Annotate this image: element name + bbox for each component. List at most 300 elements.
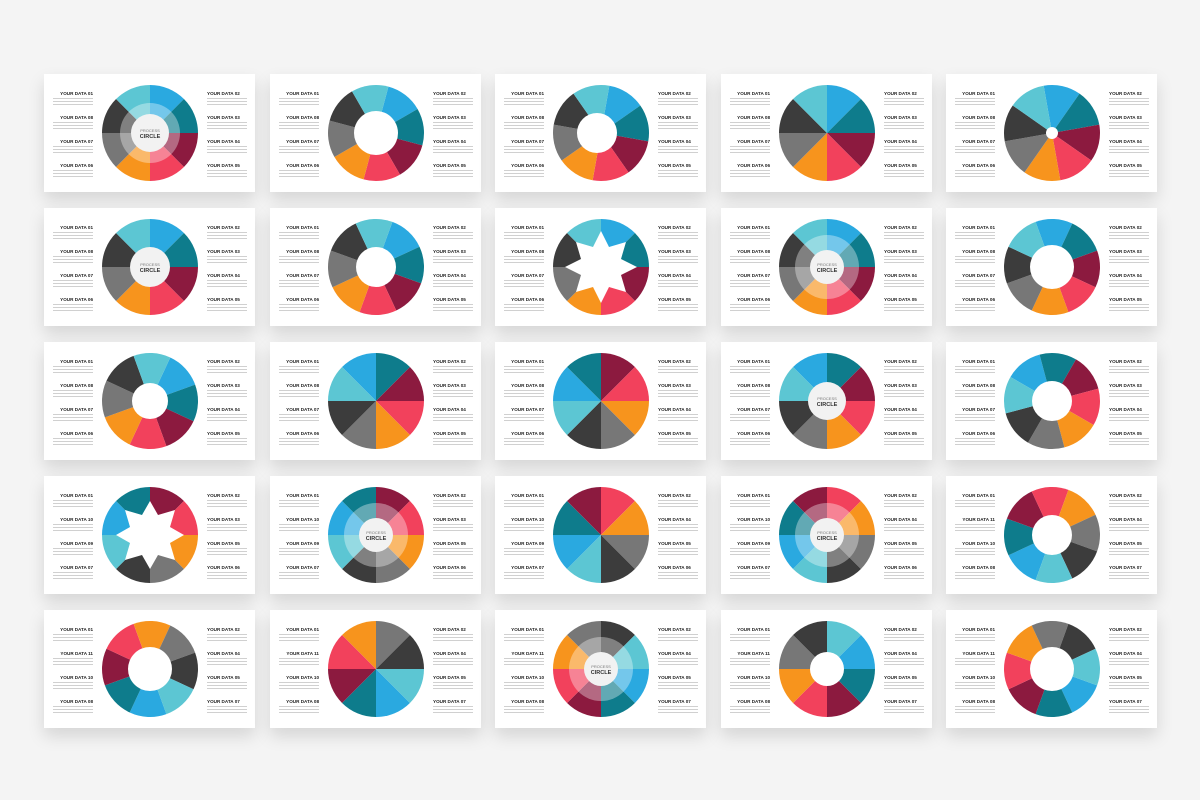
left labels — [730, 91, 770, 177]
left labels: YOUR DATA 08 — [511, 249, 544, 254]
left labels — [279, 493, 319, 589]
right labels: YOUR DATA 05 — [1109, 541, 1142, 546]
left labels: YOUR DATA 06 — [737, 431, 770, 436]
left labels: YOUR DATA 08 — [962, 699, 995, 704]
right labels — [658, 493, 698, 589]
left labels: YOUR DATA 08 — [962, 565, 995, 570]
left labels: YOUR DATA 06 — [286, 297, 319, 302]
right labels — [1109, 627, 1149, 723]
right labels: YOUR DATA 05 — [1109, 431, 1142, 436]
left labels: YOUR DATA 07 — [60, 273, 93, 278]
right labels: YOUR DATA 04 — [1109, 651, 1142, 656]
right labels — [1109, 225, 1149, 311]
left labels: YOUR DATA 06 — [962, 431, 995, 436]
right labels: YOUR DATA 04 — [658, 651, 691, 656]
right labels: YOUR DATA 04 — [207, 407, 240, 412]
left labels: YOUR DATA 08 — [511, 115, 544, 120]
left labels: YOUR DATA 06 — [60, 163, 93, 168]
right labels: YOUR DATA 05 — [658, 541, 691, 546]
left labels — [53, 91, 93, 177]
right labels: YOUR DATA 03 — [884, 249, 917, 254]
process circle chart: CIRCLE — [140, 134, 161, 140]
left labels: YOUR DATA 07 — [511, 139, 544, 144]
right labels: YOUR DATA 03 — [884, 115, 917, 120]
right labels: YOUR DATA 05 — [884, 163, 917, 168]
right labels: YOUR DATA 05 — [884, 541, 917, 546]
left labels: YOUR DATA 09 — [60, 541, 93, 546]
right labels: YOUR DATA 07 — [1109, 565, 1142, 570]
left labels — [53, 493, 93, 589]
right labels: YOUR DATA 04 — [1109, 139, 1142, 144]
star ring chart — [100, 485, 200, 585]
right labels: YOUR DATA 04 — [658, 407, 691, 412]
process circle chart: CIRCLE — [591, 670, 612, 676]
process circle chart: CIRCLE — [140, 268, 161, 274]
left labels — [279, 91, 319, 177]
right labels: YOUR DATA 03 — [433, 115, 466, 120]
right labels: YOUR DATA 02 — [207, 359, 240, 364]
spiral ring chart — [1002, 351, 1102, 451]
right labels: YOUR DATA 02 — [658, 359, 691, 364]
right labels: YOUR DATA 03 — [433, 383, 466, 388]
left labels — [504, 359, 544, 445]
left labels: YOUR DATA 11 — [286, 651, 319, 656]
right labels: YOUR DATA 04 — [207, 651, 240, 656]
pie chart — [328, 353, 424, 449]
right labels — [884, 225, 924, 311]
slide 10 — [946, 208, 1157, 326]
right labels: YOUR DATA 07 — [1109, 699, 1142, 704]
left labels: YOUR DATA 08 — [737, 249, 770, 254]
right labels: YOUR DATA 05 — [884, 431, 917, 436]
process circle chart: PROCESS — [817, 262, 837, 267]
right labels: YOUR DATA 04 — [884, 407, 917, 412]
left labels: YOUR DATA 10 — [511, 675, 544, 680]
right labels: YOUR DATA 05 — [884, 297, 917, 302]
left labels: YOUR DATA 10 — [286, 675, 319, 680]
right labels: YOUR DATA 02 — [433, 627, 466, 632]
left labels: YOUR DATA 09 — [511, 541, 544, 546]
right labels: YOUR DATA 07 — [207, 699, 240, 704]
left labels: YOUR DATA 06 — [962, 163, 995, 168]
left labels: YOUR DATA 09 — [286, 541, 319, 546]
right labels: YOUR DATA 05 — [433, 297, 466, 302]
left labels: YOUR DATA 10 — [962, 675, 995, 680]
right labels: YOUR DATA 02 — [433, 91, 466, 96]
process circle chart: CIRCLE — [817, 402, 838, 408]
right labels — [207, 225, 247, 311]
left labels: YOUR DATA 01 — [286, 225, 319, 230]
right labels: YOUR DATA 05 — [1109, 675, 1142, 680]
left labels: YOUR DATA 06 — [511, 163, 544, 168]
process circle chart — [777, 485, 877, 585]
right labels — [433, 91, 473, 177]
slide 8 — [495, 208, 706, 326]
left labels: YOUR DATA 01 — [962, 493, 995, 498]
left labels — [955, 359, 995, 455]
left labels — [730, 627, 770, 723]
process circle chart — [102, 85, 198, 181]
left labels: YOUR DATA 11 — [737, 651, 770, 656]
right labels: YOUR DATA 03 — [433, 249, 466, 254]
right labels — [884, 493, 924, 589]
left labels — [955, 91, 995, 177]
right labels: YOUR DATA 04 — [658, 139, 691, 144]
donut chart — [553, 85, 649, 181]
left labels: YOUR DATA 08 — [60, 383, 93, 388]
star ring chart — [553, 219, 649, 315]
right labels — [1109, 91, 1149, 177]
right labels: YOUR DATA 03 — [1109, 115, 1142, 120]
left labels: YOUR DATA 11 — [962, 651, 995, 656]
left labels: YOUR DATA 10 — [60, 517, 93, 522]
left labels: YOUR DATA 07 — [60, 565, 93, 570]
right labels: YOUR DATA 02 — [433, 359, 466, 364]
right labels: YOUR DATA 04 — [433, 651, 466, 656]
right labels: YOUR DATA 05 — [207, 163, 240, 168]
right labels — [207, 359, 247, 445]
right labels: YOUR DATA 05 — [207, 297, 240, 302]
left labels: YOUR DATA 01 — [286, 359, 319, 364]
process circle chart: PROCESS — [140, 262, 160, 267]
left labels: YOUR DATA 01 — [737, 359, 770, 364]
process circle chart — [326, 485, 426, 585]
right labels: YOUR DATA 03 — [207, 383, 240, 388]
left labels: YOUR DATA 01 — [737, 91, 770, 96]
left labels — [53, 225, 93, 311]
slide 13 — [495, 342, 706, 460]
slide 20 — [946, 476, 1157, 594]
left labels: YOUR DATA 11 — [962, 517, 995, 522]
left labels: YOUR DATA 08 — [286, 115, 319, 120]
left labels: YOUR DATA 08 — [511, 699, 544, 704]
right labels: YOUR DATA 05 — [1109, 297, 1142, 302]
right labels: YOUR DATA 04 — [207, 139, 240, 144]
right labels — [884, 627, 924, 723]
slide 3 — [495, 74, 706, 192]
left labels: YOUR DATA 06 — [962, 297, 995, 302]
right labels: YOUR DATA 07 — [658, 699, 691, 704]
slide 11 — [44, 342, 255, 460]
slide 23 — [495, 610, 706, 728]
right labels — [207, 91, 247, 177]
right labels: YOUR DATA 04 — [1109, 407, 1142, 412]
left labels: YOUR DATA 08 — [737, 699, 770, 704]
right labels: YOUR DATA 02 — [207, 493, 240, 498]
right labels: YOUR DATA 05 — [433, 163, 466, 168]
left labels: YOUR DATA 08 — [962, 115, 995, 120]
left labels: YOUR DATA 08 — [286, 383, 319, 388]
left labels: YOUR DATA 07 — [737, 407, 770, 412]
right labels: YOUR DATA 04 — [884, 651, 917, 656]
left labels: YOUR DATA 10 — [737, 517, 770, 522]
left labels: YOUR DATA 07 — [60, 139, 93, 144]
left labels: YOUR DATA 08 — [737, 383, 770, 388]
left labels: YOUR DATA 08 — [962, 383, 995, 388]
right labels: YOUR DATA 03 — [1109, 383, 1142, 388]
left labels: YOUR DATA 08 — [286, 699, 319, 704]
left labels — [504, 91, 544, 177]
right labels: YOUR DATA 02 — [433, 493, 466, 498]
slide 18 — [495, 476, 706, 594]
slide 4 — [721, 74, 932, 192]
left labels: YOUR DATA 06 — [286, 163, 319, 168]
slide 19 — [721, 476, 932, 594]
left labels — [730, 225, 770, 311]
left labels: YOUR DATA 10 — [60, 675, 93, 680]
right labels: YOUR DATA 05 — [207, 541, 240, 546]
left labels: YOUR DATA 06 — [737, 163, 770, 168]
process circle chart: PROCESS — [591, 664, 611, 669]
right labels: YOUR DATA 05 — [658, 431, 691, 436]
slide 24 — [721, 610, 932, 728]
right labels: YOUR DATA 05 — [207, 675, 240, 680]
right labels: YOUR DATA 03 — [207, 517, 240, 522]
left labels: YOUR DATA 01 — [60, 627, 93, 632]
right labels — [884, 91, 924, 177]
right labels — [658, 359, 698, 445]
slide 25 — [946, 610, 1157, 728]
left labels: YOUR DATA 06 — [286, 431, 319, 436]
left labels: YOUR DATA 01 — [962, 91, 995, 96]
process circle chart: PROCESS — [366, 530, 386, 535]
left labels — [955, 225, 995, 311]
right labels: YOUR DATA 04 — [884, 273, 917, 278]
left labels: YOUR DATA 06 — [60, 431, 93, 436]
left labels — [279, 627, 319, 723]
left labels: YOUR DATA 07 — [60, 407, 93, 412]
left labels: YOUR DATA 07 — [286, 407, 319, 412]
process circle chart: PROCESS — [817, 530, 837, 535]
right labels: YOUR DATA 03 — [658, 249, 691, 254]
right labels: YOUR DATA 02 — [658, 627, 691, 632]
process circle chart — [777, 351, 877, 451]
spiral ring chart — [100, 619, 200, 719]
right labels: YOUR DATA 03 — [658, 383, 691, 388]
process circle chart: PROCESS — [817, 396, 837, 401]
right labels: YOUR DATA 02 — [1109, 225, 1142, 230]
right labels: YOUR DATA 05 — [433, 675, 466, 680]
donut chart — [1002, 485, 1102, 585]
left labels — [504, 225, 544, 311]
left labels: YOUR DATA 07 — [511, 565, 544, 570]
right labels: YOUR DATA 05 — [1109, 163, 1142, 168]
right labels: YOUR DATA 03 — [207, 249, 240, 254]
left labels: YOUR DATA 01 — [511, 359, 544, 364]
left labels: YOUR DATA 01 — [737, 493, 770, 498]
left labels: YOUR DATA 08 — [737, 115, 770, 120]
left labels: YOUR DATA 10 — [737, 675, 770, 680]
right labels: YOUR DATA 04 — [433, 273, 466, 278]
slide 2 — [270, 74, 481, 192]
swirl pie chart — [553, 353, 649, 449]
right labels — [658, 91, 698, 177]
pie chart — [779, 85, 875, 181]
donut chart — [777, 619, 877, 719]
left labels — [53, 359, 93, 445]
right labels: YOUR DATA 06 — [884, 565, 917, 570]
right labels — [433, 493, 473, 589]
slide 5 — [946, 74, 1157, 192]
left labels — [279, 359, 319, 445]
left labels: YOUR DATA 08 — [60, 699, 93, 704]
left labels: YOUR DATA 07 — [286, 139, 319, 144]
left labels: YOUR DATA 11 — [511, 651, 544, 656]
right labels: YOUR DATA 02 — [658, 493, 691, 498]
left labels — [279, 225, 319, 311]
left labels: YOUR DATA 06 — [511, 431, 544, 436]
right labels — [1109, 359, 1149, 455]
left labels: YOUR DATA 01 — [60, 91, 93, 96]
left labels: YOUR DATA 07 — [962, 139, 995, 144]
left labels: YOUR DATA 01 — [962, 225, 995, 230]
process circle chart: CIRCLE — [366, 536, 387, 542]
left labels — [504, 493, 544, 589]
arrow ring chart — [328, 219, 424, 315]
swirl pie chart — [326, 619, 426, 719]
right labels: YOUR DATA 05 — [433, 431, 466, 436]
right labels: YOUR DATA 02 — [884, 493, 917, 498]
right labels: YOUR DATA 02 — [207, 627, 240, 632]
right labels — [433, 359, 473, 445]
right labels: YOUR DATA 04 — [433, 139, 466, 144]
right labels: YOUR DATA 04 — [884, 139, 917, 144]
right labels: YOUR DATA 02 — [658, 91, 691, 96]
left labels: YOUR DATA 01 — [60, 225, 93, 230]
swirl pie chart — [551, 485, 651, 585]
left labels: YOUR DATA 08 — [60, 249, 93, 254]
right labels: YOUR DATA 02 — [884, 91, 917, 96]
left labels: YOUR DATA 01 — [511, 493, 544, 498]
left labels: YOUR DATA 01 — [511, 627, 544, 632]
right labels: YOUR DATA 04 — [433, 407, 466, 412]
left labels: YOUR DATA 11 — [60, 651, 93, 656]
right labels: YOUR DATA 05 — [207, 431, 240, 436]
right labels: YOUR DATA 05 — [658, 675, 691, 680]
right labels: YOUR DATA 02 — [658, 225, 691, 230]
right labels: YOUR DATA 02 — [1109, 493, 1142, 498]
left labels: YOUR DATA 07 — [511, 407, 544, 412]
right labels: YOUR DATA 04 — [658, 273, 691, 278]
left labels — [730, 359, 770, 445]
left labels: YOUR DATA 01 — [737, 225, 770, 230]
left labels: YOUR DATA 08 — [60, 115, 93, 120]
right labels — [658, 225, 698, 311]
right labels: YOUR DATA 02 — [207, 91, 240, 96]
slide 1 — [44, 74, 255, 192]
right labels — [884, 359, 924, 455]
left labels: YOUR DATA 01 — [60, 359, 93, 364]
left labels — [504, 627, 544, 723]
right labels: YOUR DATA 04 — [1109, 517, 1142, 522]
spiral ring chart — [1002, 619, 1102, 719]
left labels: YOUR DATA 09 — [737, 541, 770, 546]
left labels: YOUR DATA 07 — [737, 565, 770, 570]
pinwheel chart — [1004, 85, 1100, 181]
left labels: YOUR DATA 07 — [962, 273, 995, 278]
right labels — [658, 627, 698, 723]
slide 12 — [270, 342, 481, 460]
slide 17 — [270, 476, 481, 594]
right labels: YOUR DATA 02 — [1109, 359, 1142, 364]
left labels: YOUR DATA 10 — [511, 517, 544, 522]
left labels: YOUR DATA 01 — [962, 359, 995, 364]
right labels: YOUR DATA 05 — [884, 675, 917, 680]
slide 21 — [44, 610, 255, 728]
left labels: YOUR DATA 06 — [737, 297, 770, 302]
slide 16 — [44, 476, 255, 594]
slide 6 — [44, 208, 255, 326]
right labels — [433, 627, 473, 723]
left labels: YOUR DATA 01 — [511, 91, 544, 96]
left labels: YOUR DATA 10 — [962, 541, 995, 546]
left labels — [955, 493, 995, 589]
slide 9 — [721, 208, 932, 326]
right labels: YOUR DATA 02 — [433, 225, 466, 230]
process circle chart — [779, 219, 875, 315]
right labels — [433, 225, 473, 311]
right labels: YOUR DATA 02 — [884, 627, 917, 632]
process circle chart: CIRCLE — [817, 536, 838, 542]
left labels: YOUR DATA 06 — [511, 297, 544, 302]
left labels: YOUR DATA 07 — [286, 273, 319, 278]
right labels: YOUR DATA 03 — [1109, 249, 1142, 254]
left labels: YOUR DATA 01 — [962, 627, 995, 632]
left labels — [955, 627, 995, 723]
right labels: YOUR DATA 04 — [1109, 273, 1142, 278]
right labels: YOUR DATA 03 — [207, 115, 240, 120]
left labels: YOUR DATA 07 — [737, 273, 770, 278]
left labels: YOUR DATA 10 — [286, 517, 319, 522]
left labels: YOUR DATA 08 — [962, 249, 995, 254]
right labels: YOUR DATA 06 — [658, 565, 691, 570]
right labels: YOUR DATA 03 — [658, 115, 691, 120]
left labels: YOUR DATA 01 — [511, 225, 544, 230]
donut chart — [328, 85, 424, 181]
right labels: YOUR DATA 06 — [433, 565, 466, 570]
right labels: YOUR DATA 07 — [884, 699, 917, 704]
right labels: YOUR DATA 02 — [207, 225, 240, 230]
right labels: YOUR DATA 02 — [1109, 91, 1142, 96]
arrow ring chart — [1004, 219, 1100, 315]
right labels: YOUR DATA 07 — [433, 699, 466, 704]
right labels: YOUR DATA 02 — [884, 359, 917, 364]
left labels — [53, 627, 93, 723]
right labels — [1109, 493, 1149, 589]
process circle chart — [102, 219, 198, 315]
right labels: YOUR DATA 05 — [433, 541, 466, 546]
slide 22 — [270, 610, 481, 728]
process circle chart: PROCESS — [140, 128, 160, 133]
right labels: YOUR DATA 04 — [658, 517, 691, 522]
slide 7 — [270, 208, 481, 326]
right labels: YOUR DATA 05 — [658, 297, 691, 302]
left labels: YOUR DATA 07 — [737, 139, 770, 144]
donut chart — [102, 353, 198, 449]
right labels: YOUR DATA 04 — [884, 517, 917, 522]
slide 15 — [946, 342, 1157, 460]
right labels: YOUR DATA 03 — [433, 517, 466, 522]
left labels: YOUR DATA 01 — [286, 627, 319, 632]
left labels: YOUR DATA 01 — [737, 627, 770, 632]
left labels: YOUR DATA 01 — [286, 493, 319, 498]
process circle chart: CIRCLE — [817, 268, 838, 274]
left labels: YOUR DATA 08 — [286, 249, 319, 254]
right labels: YOUR DATA 06 — [207, 565, 240, 570]
left labels: YOUR DATA 07 — [962, 407, 995, 412]
left labels: YOUR DATA 07 — [511, 273, 544, 278]
slide 14 — [721, 342, 932, 460]
